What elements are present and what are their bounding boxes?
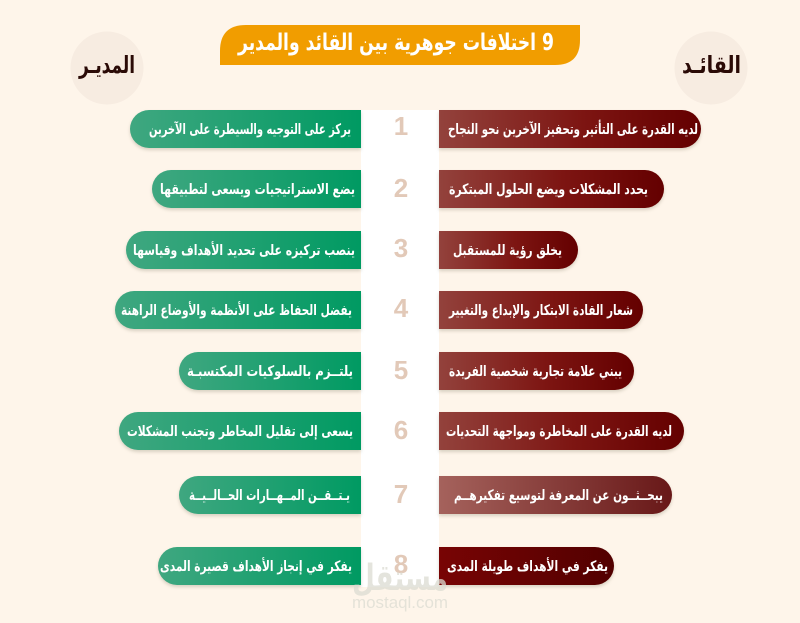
row 8: [158, 547, 614, 585]
row 3: يخلق رؤية للمستقبل: [453, 243, 562, 259]
row 1: 1: [394, 111, 408, 141]
row 6: لديه القدرة على المخاطرة ومواجهة التحديات: [446, 424, 672, 440]
heading: leader: [674, 32, 748, 104]
row 1: يركز على التوجيه والسيطرة على الآخرين: [149, 121, 351, 138]
row 6: [119, 412, 684, 450]
row 2: 2: [394, 173, 408, 203]
row 4: 4: [394, 293, 409, 323]
row 7: 7: [394, 479, 408, 509]
row 8: 8: [394, 549, 408, 579]
row 7: يبحــثــون عن المعرفة لتوسيع تفكيرهــم: [454, 488, 663, 504]
row 5: [179, 352, 634, 390]
row 3: ينصب تركيزه على تحديد الأهداف وقياسها: [133, 241, 355, 259]
heading: manager: [70, 32, 144, 104]
row 5: يبني علامة تجارية شخصية الفريدة: [449, 364, 622, 380]
row 4: يفضل الحفاظ على الأنظمة والأوضاع الراهنة: [121, 301, 352, 319]
row 8: يفكر في إنجاز الأهداف قصيرة المدى: [160, 557, 352, 575]
watermark: mostaql.com: [352, 593, 448, 612]
row 2: يحدد المشكلات ويضع الحلول المبتكرة: [449, 182, 648, 198]
row 4: [115, 291, 643, 329]
row 1: [130, 110, 701, 148]
heading: manager: المديـر: [78, 51, 135, 79]
watermark: مستقل: [352, 558, 448, 599]
title banner: [220, 25, 580, 65]
row 2: [152, 170, 664, 208]
watermark: [352, 558, 448, 612]
title banner: 9 اختلافات جوهرية بين القائد والمدير: [237, 30, 554, 56]
row 2: يضع الاستراتيجيات ويسعى لتطبيقها: [160, 182, 355, 198]
row 7: يـتــقــن المــهــارات الحــالــيــة: [189, 488, 350, 504]
row 5: يلتــزم بالسلوكيات المكتسبـة: [187, 364, 353, 380]
row 3: [126, 231, 578, 269]
row 5: 5: [394, 355, 408, 385]
row 6: يسعى إلى تقليل المخاطر وتجنب المشكلات: [127, 424, 353, 440]
row 7: [179, 476, 672, 514]
center number column: [361, 110, 439, 587]
row 4: شعار القادة الابتكار والإبداع والتغيير: [448, 303, 633, 319]
heading: leader: القائـد: [682, 51, 741, 79]
row 6: 6: [394, 415, 408, 445]
row 3: 3: [394, 233, 408, 263]
row 8: يفكر في الأهداف طويلة المدى: [447, 557, 608, 575]
row 1: لديه القدرة على التأثير وتحفيز الآخرين نحو النجاح: [448, 120, 698, 138]
